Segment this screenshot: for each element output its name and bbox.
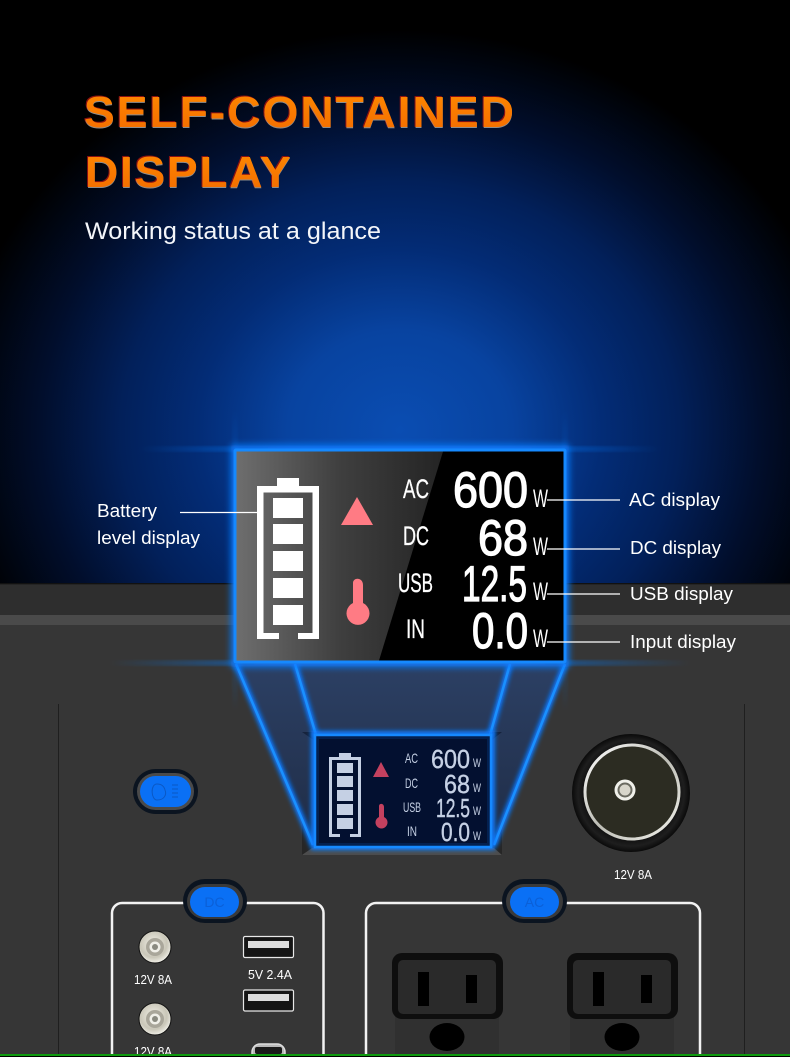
AC button: AC bbox=[525, 894, 544, 910]
small channel labels: IN bbox=[407, 823, 417, 839]
small watt units: W bbox=[473, 804, 481, 818]
channel labels: IN bbox=[406, 614, 425, 644]
small channel labels: DC bbox=[405, 775, 418, 791]
enlarged LCD display bbox=[234, 448, 566, 664]
small channel labels: AC bbox=[405, 750, 418, 766]
panel: DC ports bbox=[112, 879, 324, 1057]
title: SELF-CONTAINED bbox=[84, 87, 514, 137]
leader lines bbox=[180, 500, 620, 642]
bottom edge line bbox=[0, 1054, 790, 1057]
callout: battery level display: Battery bbox=[97, 501, 157, 521]
small warning triangle bbox=[373, 762, 389, 777]
small channel labels: USB bbox=[403, 799, 421, 815]
small wattage readings: 0.0 bbox=[441, 817, 470, 847]
USB rating label: 5V 2.4A bbox=[248, 968, 293, 982]
battery level icon bbox=[257, 478, 319, 639]
USB port 2 bbox=[244, 990, 294, 1011]
title: DISPLAY bbox=[85, 147, 291, 197]
device front panel bbox=[0, 583, 790, 1057]
socket rating label: 12V 8A bbox=[614, 868, 653, 882]
watt units: W bbox=[533, 625, 548, 653]
small on-device LCD display bbox=[314, 734, 492, 847]
AC outlet 1 bbox=[392, 953, 503, 1057]
wattage readings: 0.0 bbox=[472, 603, 528, 659]
channel labels bbox=[398, 474, 433, 644]
channel labels: USB bbox=[398, 568, 433, 598]
channel labels: AC bbox=[403, 474, 429, 504]
DC button bbox=[183, 879, 247, 923]
lamp glyph bbox=[152, 784, 178, 800]
small wattage readings bbox=[431, 744, 470, 847]
watt units: W bbox=[533, 578, 548, 606]
DC jack 1 label: 12V 8A bbox=[134, 973, 173, 987]
small wattage readings: 600 bbox=[431, 744, 470, 774]
subtitle: Working status at a glance bbox=[85, 218, 381, 245]
wattage readings: 600 bbox=[453, 462, 528, 518]
callout: battery level display bbox=[97, 501, 200, 548]
small thermometer bbox=[376, 804, 388, 828]
watt units bbox=[533, 485, 548, 653]
small channel labels bbox=[403, 750, 421, 839]
wattage readings: 12.5 bbox=[462, 556, 527, 612]
callout: USB display: USB display bbox=[630, 584, 733, 604]
DC button: DC bbox=[204, 894, 225, 910]
DC jack 2 bbox=[139, 1003, 171, 1035]
small watt units bbox=[473, 756, 481, 843]
small watt units: W bbox=[473, 781, 481, 795]
12V cigarette socket bbox=[572, 734, 690, 852]
small watt units: W bbox=[473, 756, 481, 770]
small battery icon bbox=[329, 753, 361, 837]
title bbox=[84, 87, 514, 197]
display recess in device panel bbox=[302, 732, 502, 855]
watt units: W bbox=[533, 485, 548, 513]
glare streaks around enlarged display bbox=[110, 410, 690, 710]
panel: AC outlets bbox=[366, 879, 700, 1057]
USB port 1 bbox=[244, 936, 294, 958]
DC jack 1 bbox=[139, 931, 171, 963]
warning triangle icon bbox=[341, 497, 373, 525]
small watt units: W bbox=[473, 829, 481, 843]
small wattage readings: 68 bbox=[444, 769, 470, 799]
small wattage readings: 12.5 bbox=[436, 793, 470, 823]
wattage readings: 68 bbox=[478, 510, 528, 566]
callout: Input display: Input display bbox=[630, 632, 736, 652]
watt units: W bbox=[533, 533, 548, 561]
AC button bbox=[502, 879, 567, 923]
USB-C port bbox=[252, 1044, 285, 1057]
thermometer icon bbox=[346, 579, 370, 625]
wattage readings bbox=[453, 462, 528, 659]
projection funnel from small display to enlarged display bbox=[236, 664, 565, 846]
AC outlet 2 bbox=[567, 953, 678, 1057]
callout: battery level display: level display bbox=[97, 528, 200, 548]
channel labels: DC bbox=[403, 521, 429, 551]
callout: AC display: AC display bbox=[629, 490, 720, 510]
light button bbox=[133, 769, 198, 814]
callout: DC display: DC display bbox=[630, 538, 721, 558]
